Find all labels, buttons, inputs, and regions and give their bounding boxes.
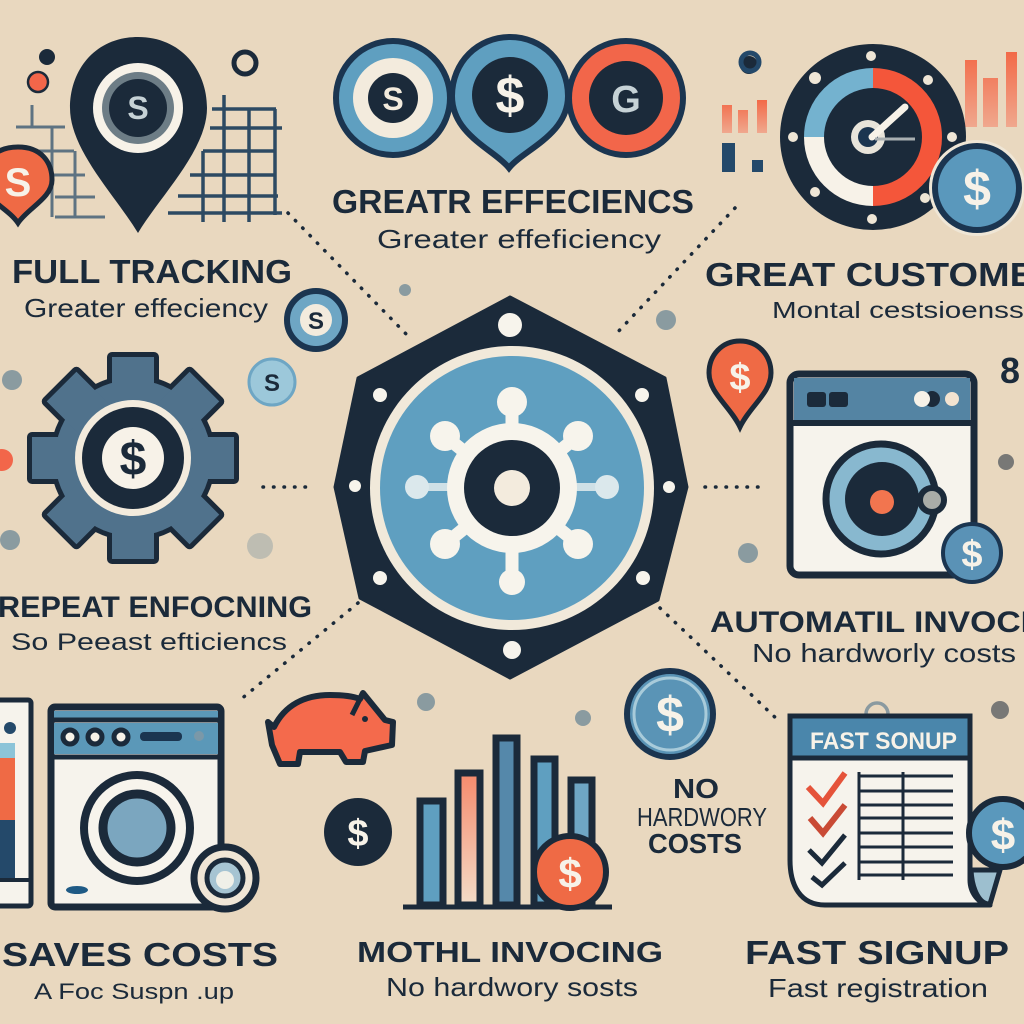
heading: no hardware costs: NO [673,773,719,804]
icon: three coins: S [382,81,404,117]
central hub [335,297,687,678]
heading: great customer: GREAT CUSTOME [705,256,1024,293]
heading: great customer [705,256,1024,323]
icon: gear with dollar [32,357,234,559]
heading: greater efficiencies: Greater effeficiency [377,224,661,254]
heading: fast signup: Fast registration [768,973,988,1003]
icon: map pin with grid [0,37,282,233]
heading: full tracking: FULL TRACKING [12,253,292,290]
heading: greater efficiencies: GREATR EFFECIENCS [332,183,694,220]
heading: full tracking [12,253,292,323]
icon: invoicing machine: 8 [1000,350,1020,391]
icon: small coin: S [308,308,324,335]
small coin: $ [347,813,369,855]
heading: monthly invoicing: MOTHL INVOCING [357,937,663,969]
icon: three coins: G [611,79,641,121]
heading: no hardware costs: HARDWORY [637,802,767,832]
heading: repeat enforcing [0,591,312,656]
heading: full tracking: Greater effeciency [24,293,268,323]
small coin [249,359,295,405]
icon: invoicing machine [790,350,1020,582]
heading: no hardware costs: COSTS [648,828,742,859]
heading: saves costs [2,936,278,1004]
icon: signup checklist [790,703,1024,905]
heading: automatic invoicing: No hardworly costs [752,638,1016,668]
icon: bar chart with coin [403,738,612,908]
icon: map pin with grid: S [127,90,149,126]
icon: small coin [287,291,345,349]
icon: three coins: $ [496,67,525,125]
icon: location pin [709,341,771,427]
heading: monthly invoicing [357,937,663,1002]
icon: three coins [336,37,683,168]
icon: signup checklist: FAST SONUP [810,728,957,755]
icon: piggy bank [268,693,393,764]
heading: automatic invoicing [710,606,1024,668]
icon: bar chart with coin: $ [558,850,582,897]
icon: invoicing machine: $ [961,534,983,576]
small coin [324,798,392,866]
heading: fast signup [745,934,1009,1003]
icon: signup checklist: $ [991,811,1015,860]
heading: no hardware costs [637,773,767,859]
coin with dollar [627,671,713,757]
heading: saves costs: A Foc Suspn .up [34,979,234,1004]
icon: washing machine [0,700,256,909]
icon: gauge with coin: $ [963,161,991,217]
icon: gauge with coin [722,44,1024,236]
heading: saves costs: SAVES COSTS [2,936,278,973]
coin with dollar: $ [656,687,684,743]
heading: fast signup: FAST SIGNUP [745,934,1009,971]
small coin: S [264,370,280,397]
heading: greater efficiencies [332,183,694,254]
heading: great customer: Montal cestsioenss. [772,297,1024,323]
heading: monthly invoicing: No hardwory sosts [386,972,638,1002]
heading: repeat enforcing: So Peeast efticiencs [11,629,287,656]
heading: automatic invoicing: AUTOMATIL INVOCI [710,606,1024,639]
icon: location pin: $ [729,357,751,399]
icon: map pin with grid: S [5,161,31,205]
icon: gear with dollar: $ [120,433,147,486]
heading: repeat enforcing: REPEAT ENFOCNING [0,591,312,624]
